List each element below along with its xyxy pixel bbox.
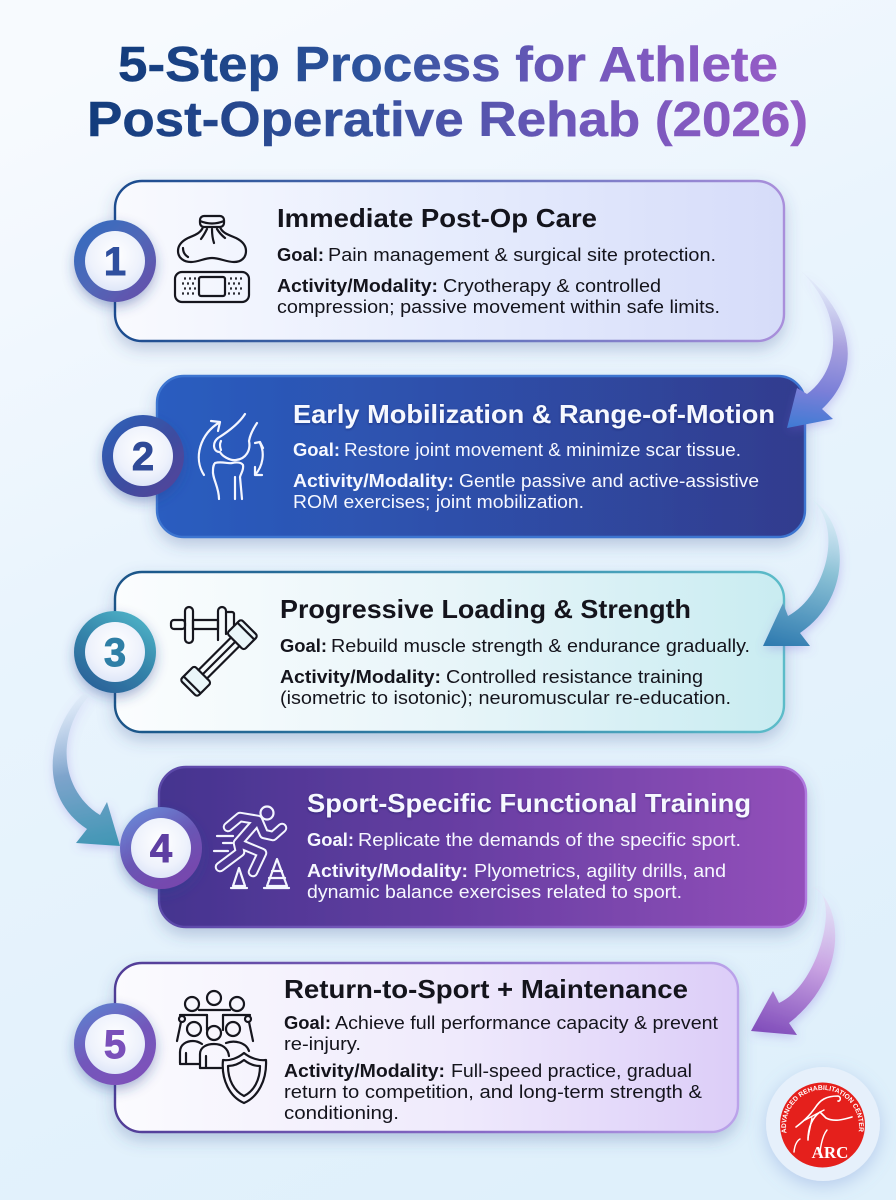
text: step 4 goal and activity [307,830,741,902]
text: step 1 goal and activity [277,245,720,317]
panel: step 3 [74,572,784,732]
number badge 3: 3 [104,631,126,675]
text: step 1 goal and activity: Pain management & surgical site protection. [328,245,716,265]
heading: step 2: Early Mobilization & Range-of-Motion [293,399,775,429]
text: step 1 goal and activity: Cryotherapy & controlled [443,276,661,296]
logo: ARC badge [760,1066,886,1192]
number badge 5: 5 [104,1023,126,1067]
text: step 5 goal and activity: conditioning. [284,1103,399,1123]
text: step 5 goal and activity: Activity/Modality: [284,1061,445,1081]
heading: step 5: Return-to-Sport + Maintenance [284,974,688,1004]
number badge 3 [74,611,156,693]
panel: step 5 [74,963,738,1132]
text: step 5 goal and activity: Full-speed practice, gradual [451,1061,692,1081]
icon: knee joint [199,414,263,499]
text: step 3 goal and activity: Goal: [280,636,327,656]
text: step 2 goal and activity: Goal: [293,440,340,460]
text: step 2 goal and activity [293,440,759,512]
text: step 5 goal and activity: re-injury. [284,1034,361,1054]
text: step 3 goal and activity: Controlled resistance training [446,667,703,687]
text: step 1 goal and activity: Activity/Modality: [277,276,438,296]
title [87,38,808,147]
panel: step 1 [74,181,784,341]
heading: step 4: Sport-Specific Functional Training [307,788,751,818]
number badge 1: 1 [104,240,126,284]
heading: step 3: Progressive Loading & Strength [280,594,691,624]
number badge 1 [74,220,156,302]
text: step 2 goal and activity: Activity/Modality: [293,471,454,491]
text: step 2 goal and activity: ROM exercises; joint mobilization. [293,492,584,512]
number badge 2 [102,415,184,497]
text: step 3 goal and activity: Activity/Modality: [280,667,441,687]
text: step 1 goal and activity: Goal: [277,245,324,265]
icon: team with shield [177,991,266,1103]
text: step 5 goal and activity: return to competition, and long-term strength & [284,1082,702,1102]
panel: step 2 [102,376,805,537]
logo ring text: ADVANCED REHABILITATION CENTER [781,1085,864,1133]
text: step 3 goal and activity: (isometric to isotonic); neuromuscular re-education. [280,688,731,708]
arrow: step 1 to 2 [787,270,848,428]
arrow: step 2 to 3 [763,498,840,646]
text: step 4 goal and activity: dynamic balance exercises related to sport. [307,882,682,902]
arrow: step 3 to 4 [53,693,120,846]
text: step 4 goal and activity: Replicate the demands of the specific sport. [358,830,741,850]
title: 5-Step Process for Athlete [118,38,778,92]
arrow: step 4 to 5 [751,887,835,1035]
logo figure [794,1096,852,1152]
text: step 4 goal and activity: Plyometrics, agility drills, and [474,861,726,881]
text: step 4 goal and activity: Goal: [307,830,354,850]
text: step 4 goal and activity: Activity/Modality: [307,861,468,881]
logo initials: ARC [812,1143,848,1162]
icon: ice bag and bandage [175,216,249,302]
number badge 2: 2 [132,435,154,479]
text: step 3 goal and activity [280,636,750,708]
number badge 4 [120,807,202,889]
text: step 1 goal and activity: compression; passive movement within safe limits. [277,297,720,317]
text: step 3 goal and activity: Rebuild muscle strength & endurance gradually. [331,636,750,656]
icon: dumbbell and resistance weight [171,607,258,697]
panel: step 4 [120,767,806,927]
text: step 5 goal and activity: Goal: [284,1013,331,1033]
title: Post-Operative Rehab (2026) [87,93,808,147]
heading: step 1: Immediate Post-Op Care [277,203,597,233]
text: step 5 goal and activity: Achieve full performance capacity & prevent [335,1013,718,1033]
number badge 4: 4 [150,827,173,871]
number badge 5 [74,1003,156,1085]
icon: runner with cones [214,806,289,888]
text: step 2 goal and activity: Restore joint movement & minimize scar tissue. [344,440,741,460]
text: step 5 goal and activity [284,1013,718,1123]
text: step 2 goal and activity: Gentle passive and active-assistive [459,471,759,491]
